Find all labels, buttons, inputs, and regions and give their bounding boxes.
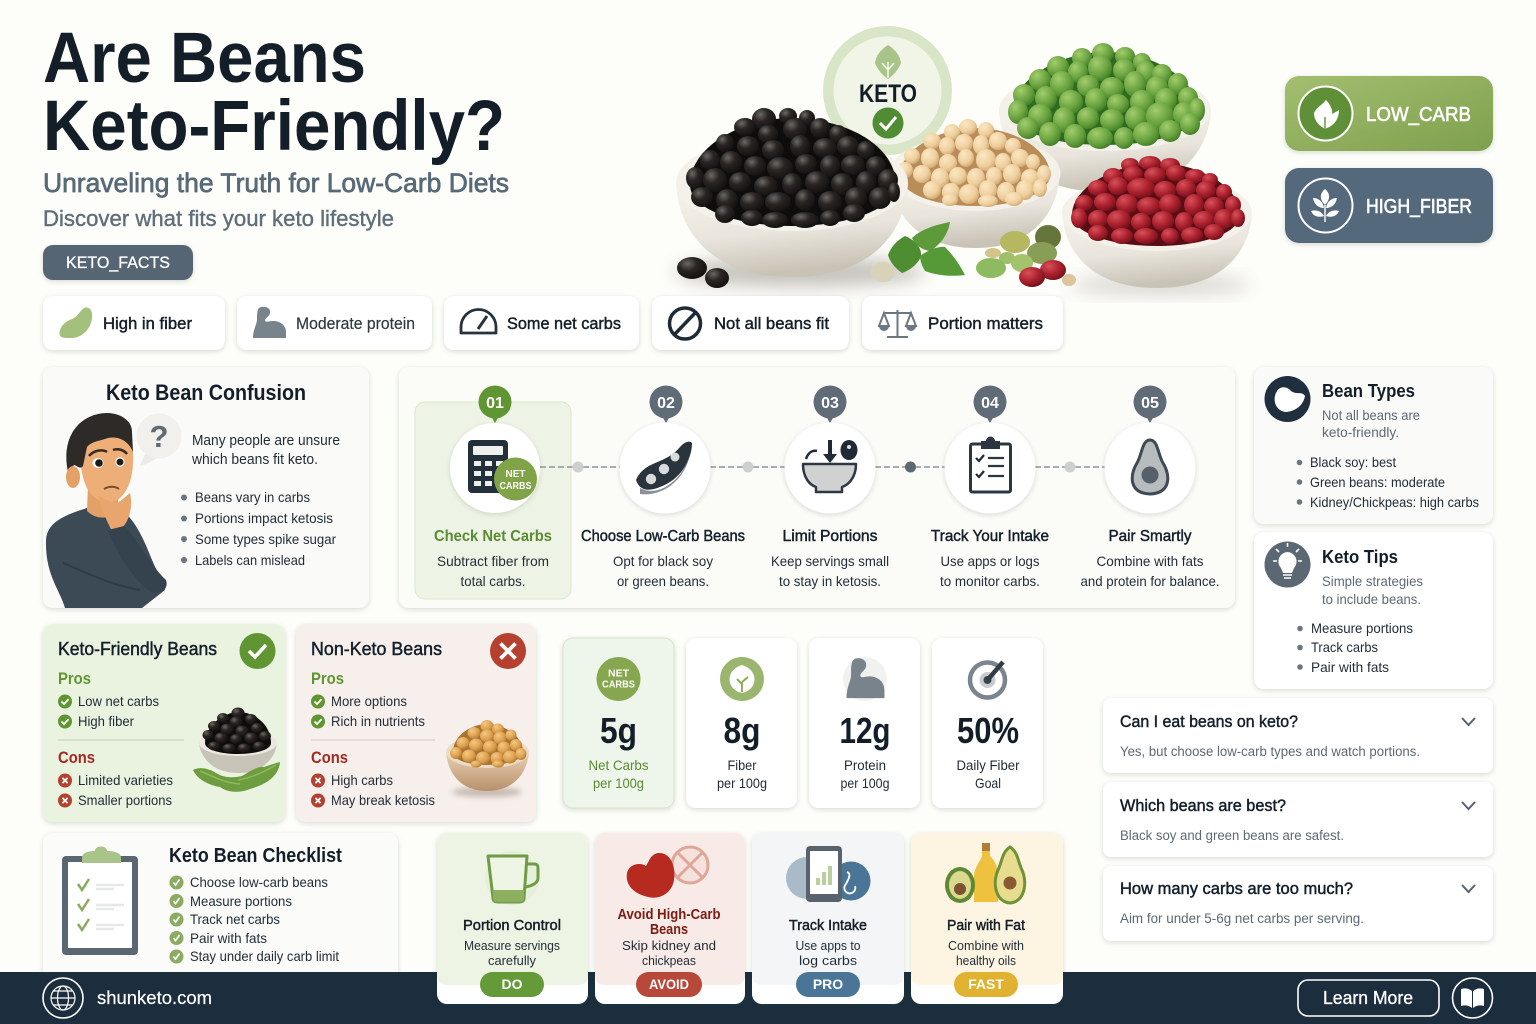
icon: phone with chart [786,846,870,902]
icon: globe [43,978,83,1018]
tag: FAST: FAST [968,976,1004,992]
panel: bean types [1254,367,1493,524]
tip card: track intake [752,833,904,1004]
step 01: CARBS [500,481,532,492]
heading: Keto Bean Confusion [106,380,306,405]
tip card: portion control: Portion Control [463,918,561,934]
bullet list: Portions impact ketosis [195,510,333,526]
keto badge [823,26,952,155]
stat card: fiber: Fiber [728,757,757,773]
intro text: Many people are unsure [192,433,340,449]
faq: which beans are best [1103,782,1493,857]
chip: moderate protein: Moderate protein [296,314,415,333]
pros: Pros [58,670,91,688]
pros [58,670,159,729]
tag: FAST [954,972,1018,997]
faq: can I eat beans on keto [1103,698,1493,773]
icon: measuring cup [485,851,539,905]
tip card: track intake: Track Intake [789,918,867,934]
icon: book [1452,978,1492,1018]
tag: PRO [796,972,860,997]
step 03: 03 [821,395,839,412]
bowl: red kidney beans [1062,156,1252,288]
bullet list: Green beans: moderate [1310,474,1445,490]
step 05: 05 [1141,395,1159,412]
cons: Cons [58,749,95,767]
faq: how many carbs: Aim for under 5-6g net carbs per serving. [1120,911,1364,926]
cons [58,749,173,808]
bullet list: Pair with fats [1311,659,1389,675]
bullet list [1297,620,1413,675]
bullet list [181,489,336,568]
stat card: daily fiber goal: Goal [975,775,1001,791]
faq: which beans are best: Which beans are best? [1120,797,1286,815]
badge: LOW_CARB [1285,76,1493,151]
chip: high in fiber [43,296,225,350]
illustration: chickpea bowl [446,720,529,797]
step 03: to stay in ketosis. [779,573,881,589]
step 04 [931,386,1049,589]
panel: keto tips: to include beans. [1322,591,1421,607]
cons: Limited varieties [78,772,173,788]
faq: which beans are best: Black soy and green beans are safest. [1120,828,1344,843]
bullet list: Labels can mislead [195,552,305,568]
stat card: net carbs: per 100g [593,775,644,791]
faq: can I eat beans on keto: Yes, but choose low-carb types and watch portions. [1120,744,1420,759]
button: learn more [1298,980,1439,1016]
icon: cross [490,633,526,669]
stat card: fiber: per 100g [717,775,767,791]
icon: light bulb [1264,542,1310,588]
step 02: or green beans. [617,573,709,589]
step 01: NET [506,469,526,480]
step 01: 01 [486,395,504,412]
step 04: Track Your Intake [931,528,1049,545]
thought bubble [136,414,182,466]
step 05: Pair Smartly [1108,528,1192,545]
step 02: 02 [657,395,675,412]
tip card: pair with fat: healthy oils [956,953,1016,968]
stat card: protein: 12g [840,710,890,751]
intro text: which beans fit keto. [191,452,318,468]
step 02 [581,386,745,589]
bullet list [1297,454,1479,510]
step 05 [1080,386,1220,589]
step 03: Keep servings small [771,553,889,569]
faq: how many carbs: How many carbs are too much? [1120,880,1353,898]
panel: bean types: Not all beans are [1322,407,1420,423]
stat card: net carbs: Net Carbs [588,757,648,773]
pros: Pros [311,670,344,688]
button: learn more: Learn More [1323,988,1413,1008]
panel: non-keto beans [296,624,536,822]
tag: PRO: PRO [813,976,843,992]
checklist items: Choose low-carb beans [190,874,328,890]
chip: not all beans fit: Not all beans fit [714,314,829,333]
badge: HIGH_FIBER [1285,168,1493,243]
step 04: Use apps or logs [940,553,1040,569]
cons: Smaller portions [78,792,172,808]
bowl: tan soybeans [889,119,1060,248]
panel: keto bean confusion [43,367,369,608]
panel: five steps process [399,367,1235,608]
tip card: pair with fat [911,833,1063,1004]
panel: keto tips: Keto Tips [1322,547,1398,567]
tip card: track intake: Use apps to [796,938,860,953]
tag: AVOID [636,972,702,997]
pros [311,670,425,729]
title: Are Beans [43,19,366,98]
badge: HIGH_FIBER: HIGH_FIBER [1366,196,1472,218]
step 05: Combine with fats [1096,553,1204,569]
bullet list: Black soy: best [1310,454,1396,470]
stat card: net carbs: 5g [600,710,637,751]
cons: Cons [311,749,348,767]
stat card: fiber: 8g [724,710,760,751]
step 03: Limit Portions [782,528,878,545]
pros: High fiber [78,713,134,729]
checklist items: Pair with fats [190,930,267,946]
tag: KETO_FACTS [43,245,193,280]
tip card: avoid high-carb beans: Beans [650,922,688,938]
step 02: Choose Low-Carb Beans [581,528,745,545]
bullet list: Beans vary in carbs [195,489,310,505]
subtitle: Unraveling the Truth for Low-Carb Diets [43,168,509,198]
thought bubble: ? [150,419,168,454]
title: Keto-Friendly? [43,87,505,166]
panel: bean types: Bean Types [1322,381,1415,401]
loose beans and leaves [677,222,1076,288]
chip: portion matters [862,296,1063,350]
tip card: portion control [437,833,588,1004]
pros: Rich in nutrients [331,713,425,729]
stat card: protein: Protein [844,757,886,773]
checklist items: Measure portions [190,893,292,909]
chip: portion matters: Portion matters [928,314,1043,333]
tag: KETO_FACTS: KETO_FACTS [66,254,170,272]
tip card: avoid high-carb beans: chickpeas [642,953,696,968]
faq: how many carbs [1103,866,1493,941]
chip: moderate protein [237,296,432,350]
hero illustration: bowls of beans [675,26,1252,293]
tip card: portion control: carefully [488,953,536,968]
step 01 [434,386,552,589]
cons: May break ketosis [331,792,435,808]
checklist items: Stay under daily carb limit [190,948,339,964]
bowl: black soybeans [676,108,908,277]
tag: AVOID: AVOID [649,976,689,992]
intro text [191,433,340,468]
stat card: fiber [686,638,797,808]
title [43,19,505,166]
stat card: protein: per 100g [840,775,890,791]
bullet list: Measure portions [1311,620,1413,636]
icon: bean [1264,376,1310,422]
panel: keto-friendly beans [43,624,285,822]
step 05: and protein for balance. [1080,573,1220,589]
tip card: track intake: log carbs [799,953,858,968]
checklist items: Track net carbs [190,911,280,927]
step 04: to monitor carbs. [940,573,1040,589]
tagline: Discover what fits your keto lifestyle [43,206,394,231]
pros: More options [331,693,407,709]
pros: Low net carbs [78,693,159,709]
site name: shunketo.com [97,988,212,1008]
chip: some net carbs: Some net carbs [507,314,621,333]
panel: keto bean checklist [43,833,398,972]
panel: keto-friendly beans: Keto-Friendly Beans [58,639,217,659]
bowl: green beans [999,43,1211,192]
keto badge: KETO [859,80,917,108]
stat card: net carbs [563,638,674,808]
tip card: portion control: Measure servings [464,938,560,953]
illustration: confused man [46,413,167,608]
icon: check [240,633,276,669]
chip: some net carbs [444,296,639,350]
tip card: pair with fat: Pair with Fat [947,918,1025,934]
chip: not all beans fit [652,296,849,350]
faq: can I eat beans on keto: Can I eat beans on keto? [1120,713,1298,731]
tip card: pair with fat: Combine with [948,938,1024,953]
stat card: net carbs: NET [608,668,630,680]
tip card: avoid high-carb beans: Avoid High-Carb [618,907,721,923]
icon: clipboard [62,846,138,955]
badge: LOW_CARB: LOW_CARB [1366,104,1471,126]
stat card: protein [809,638,920,808]
stat card: net carbs: CARBS [602,678,635,690]
stat card: daily fiber goal [932,638,1043,808]
bullet list: Kidney/Chickpeas: high carbs [1310,494,1479,510]
step 04: 04 [981,395,999,412]
footer bar [0,972,1536,1024]
step 01: Subtract fiber from [437,553,549,569]
cons [311,749,435,808]
bullet list: Some types spike sugar [195,531,336,547]
chip: high in fiber: High in fiber [103,314,192,333]
tip card: avoid high-carb beans [595,833,745,1004]
step 01: total carbs. [460,573,526,589]
step 02: Opt for black soy [613,553,713,569]
cons: High carbs [331,772,393,788]
panel: keto tips [1254,532,1493,689]
illustration: black soybean bowl with pods [193,708,280,792]
panel: keto tips: Simple strategies [1322,573,1423,589]
panel: bean types: keto-friendly. [1322,424,1399,440]
stat card: daily fiber goal: 50% [957,710,1019,751]
tip card: avoid high-carb beans: Skip kidney and [622,938,716,953]
panel: non-keto beans: Non-Keto Beans [311,639,442,659]
stat card: daily fiber goal: Daily Fiber [956,757,1020,773]
icon: kidney bean with prohibition [627,847,708,898]
step 03 [771,386,889,589]
tag: DO: DO [502,976,523,992]
tag: DO [480,972,544,997]
panel: keto bean checklist: Keto Bean Checklist [169,845,342,867]
step 01: Check Net Carbs [434,528,552,545]
bullet list: Track carbs [1311,639,1378,655]
icon: avocado and oil [945,843,1025,903]
checklist items [170,874,339,964]
